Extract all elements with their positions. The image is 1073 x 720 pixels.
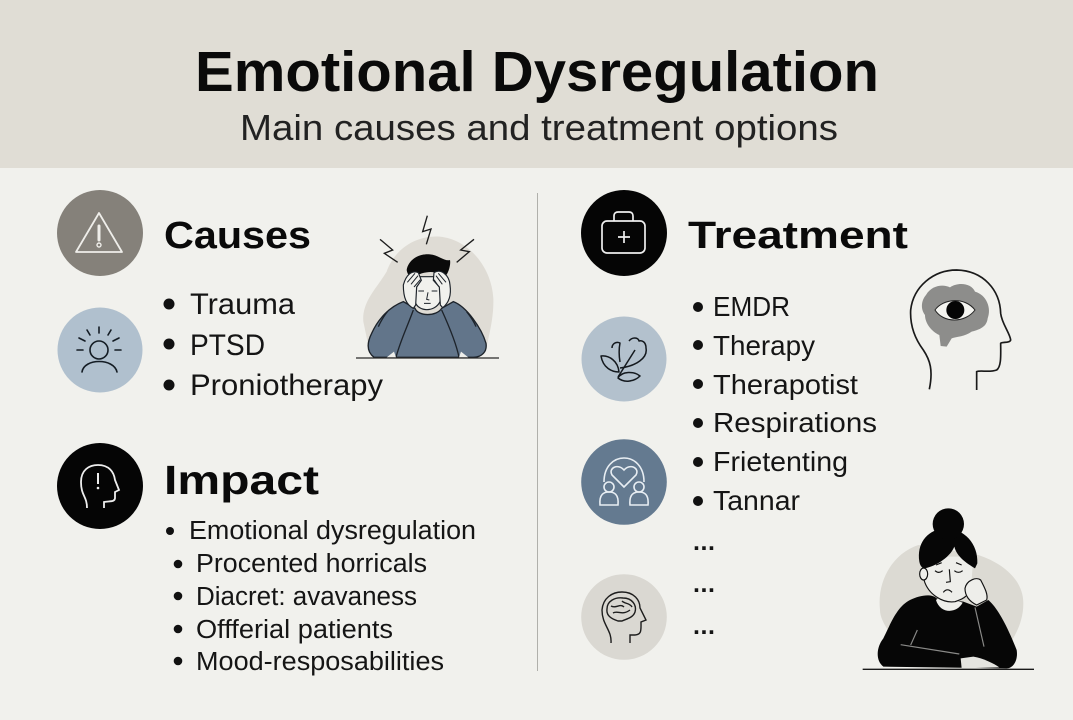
illustration: sad woman resting head on hand [863, 508, 1034, 669]
icon: plant [582, 316, 666, 402]
impact list: Procented horricals [196, 550, 427, 578]
treatment list: ... [693, 570, 715, 598]
heading: causes: Causes [164, 215, 311, 257]
icon: person with radiating lines [58, 308, 142, 392]
icon: two people with heart [581, 439, 667, 525]
illustration: head with brain and eye [911, 270, 1011, 390]
impact list: Emotional dysregulation [189, 517, 476, 545]
panel: causes [57, 190, 499, 402]
treatment list: Therapy [713, 330, 815, 361]
heading: impact: Impact [164, 457, 319, 503]
causes list [164, 288, 383, 402]
treatment list: Frietenting [713, 446, 848, 477]
impact list: Mood-resposabilities [196, 648, 444, 676]
icon: medical case [581, 190, 667, 276]
subtitle: Main causes and treatment options [240, 107, 838, 148]
treatment list: Therapotist [713, 369, 858, 400]
treatment list [693, 291, 877, 640]
icon: warning triangle [57, 190, 143, 276]
panel: impact [57, 443, 476, 676]
icon: brain in head [581, 574, 667, 660]
treatment list: Tannar [713, 485, 800, 516]
impact list: Offferial patients [196, 616, 393, 644]
treatment list: ... [693, 612, 715, 640]
impact list [166, 517, 476, 676]
causes list: Proniotherapy [190, 369, 383, 402]
treatment list: ... [693, 528, 715, 556]
title: Emotional Dysregulation [195, 40, 879, 104]
causes list: PTSD [190, 329, 265, 362]
panel: treatment [581, 190, 1034, 669]
treatment list: EMDR [713, 291, 790, 322]
treatment list: Respirations [713, 407, 877, 438]
impact list: Diacret: avavaness [196, 583, 417, 611]
heading: treatment: Treatment [688, 215, 908, 257]
illustration: stressed man holding head [356, 216, 499, 358]
icon: head with exclamation [57, 443, 143, 529]
header band [0, 0, 1073, 168]
causes list: Trauma [190, 288, 295, 321]
